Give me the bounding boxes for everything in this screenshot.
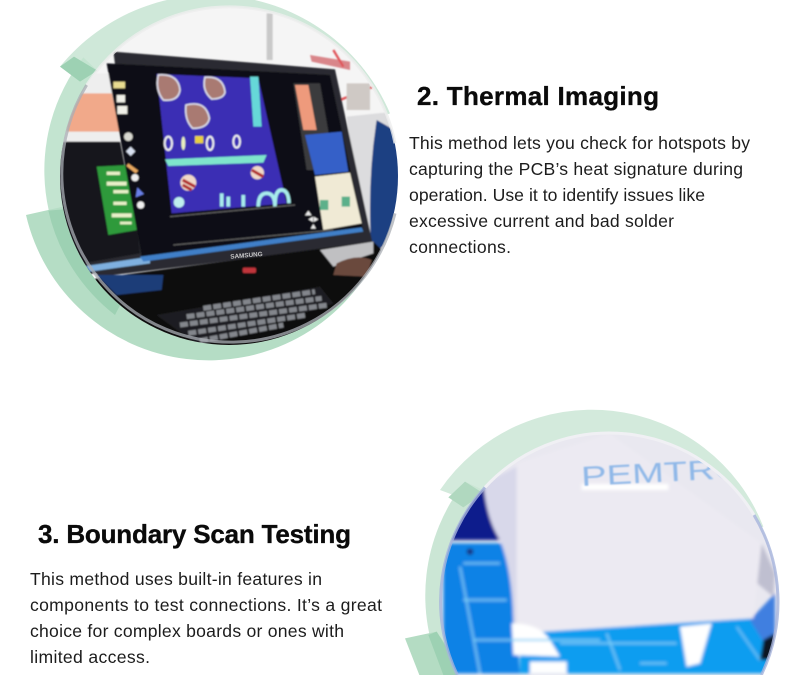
photo content [433, 430, 787, 675]
text block: boundary scan description: limited access. [30, 647, 150, 667]
photo: boundary scan machine [405, 410, 787, 675]
heading: Boundary Scan Testing: 3. Boundary Scan Testing [38, 519, 351, 549]
green ring arcs [26, 0, 390, 360]
text block: boundary scan description: choice for complex boards or ones with [30, 621, 344, 641]
photo content [60, 8, 398, 345]
text block: thermal imaging description: operation. Use it to identify issues like [409, 185, 705, 205]
brand label: SAMSUNG: SAMSUNG [230, 251, 263, 261]
green ring arcs [405, 410, 763, 675]
text block: thermal imaging description: capturing the PCB’s heat signature during [409, 159, 743, 179]
text block: thermal imaging description [409, 133, 750, 257]
photo: thermal imaging monitor [26, 0, 417, 367]
brand label: PEMTRO: PEMTRO [580, 452, 745, 492]
heading: Thermal Imaging: 2. Thermal Imaging [417, 81, 659, 111]
text block: thermal imaging description: This method lets you check for hotspots by [409, 133, 750, 153]
text block: thermal imaging description: connections. [409, 237, 511, 257]
text block: thermal imaging description: excessive current and bad solder [409, 211, 674, 231]
text block: boundary scan description: This method uses built-in features in [30, 569, 322, 589]
text block: boundary scan description [30, 569, 382, 667]
text block: boundary scan description: components to test connections. It’s a great [30, 595, 382, 615]
